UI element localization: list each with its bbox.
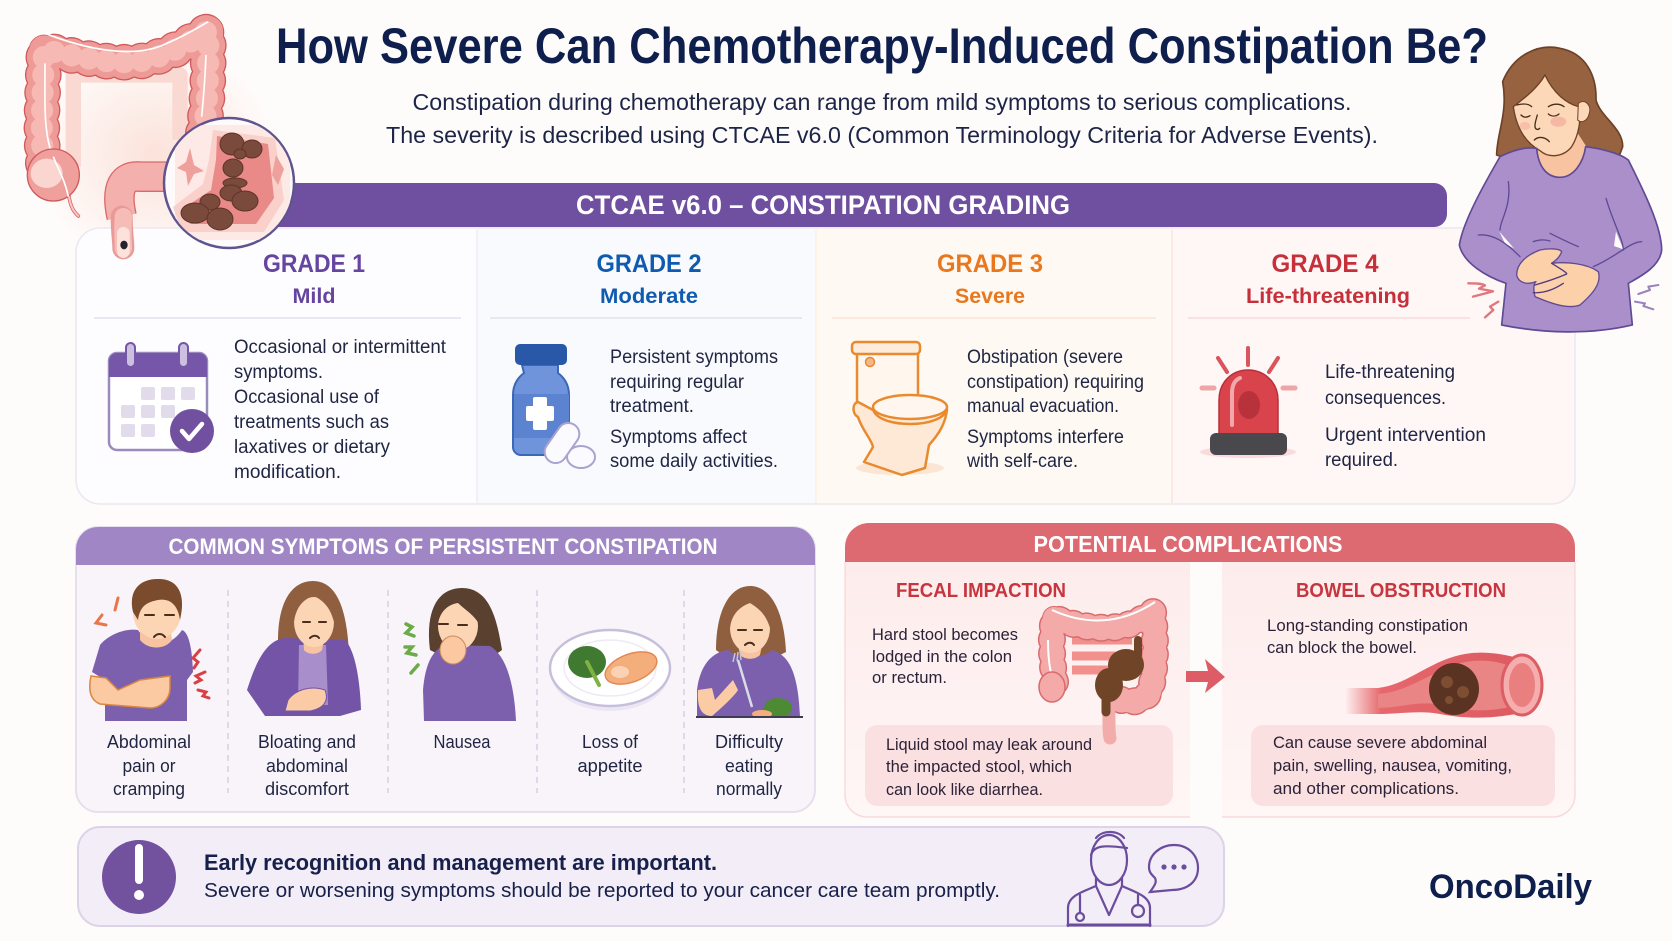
grade 3: Severe [955, 285, 1025, 308]
callout text: Severe or worsening symptoms should be reported to your cancer care team promptly. [204, 879, 1000, 902]
symptom: difficulty eating: Difficulty [715, 732, 783, 752]
symptom: loss of appetite [550, 630, 670, 776]
symptom: loss of appetite: Loss of [582, 732, 639, 752]
grade 4 [1200, 250, 1486, 471]
subtitle [386, 89, 1378, 148]
panel: potential complications [845, 523, 1575, 817]
grade 3 description: with self-care. [966, 451, 1078, 472]
symptom: bloating: abdominal [266, 756, 348, 776]
callout: early recognition [78, 827, 1224, 926]
logo: OncoDaily: OncoDaily [1429, 868, 1592, 906]
grade 1 description: modification. [234, 462, 341, 483]
grade 2 description: treatment. [610, 396, 694, 417]
icon: red siren [1200, 348, 1296, 458]
subtitle: The severity is described using CTCAE v6.0 (Common Terminology Criteria for Adverse Events). [386, 122, 1378, 148]
symptom: abdominal pain: cramping [113, 779, 185, 799]
heading banner: CTCAE v6.0 constipation grading [262, 183, 1447, 227]
complication: fecal impaction: FECAL IMPACTION [896, 580, 1066, 602]
icon: toilet [852, 342, 947, 475]
symptom: abdominal pain [90, 579, 209, 799]
icon: exclamation [102, 840, 176, 914]
leak note box: the impacted stool, which [886, 757, 1072, 776]
symptoms heading: COMMON SYMPTOMS OF PERSISTENT CONSTIPATION [168, 534, 718, 559]
complication: fecal impaction: lodged in the colon [872, 647, 1012, 666]
grade 1 description [234, 337, 447, 483]
grade 1 description: Occasional use of [234, 387, 380, 408]
complication: fecal impaction: or rectum. [872, 668, 947, 687]
icon: calendar [109, 343, 214, 453]
symptom: loss of appetite: appetite [578, 756, 642, 776]
complication: bowel obstruction: Long-standing constipation [1267, 616, 1468, 635]
illustration: magnified impacted stool [164, 118, 294, 248]
icon: colon with impacted stool [1039, 602, 1155, 738]
symptom: difficulty eating: normally [716, 779, 782, 799]
callout text [204, 850, 1000, 902]
grade 2: Moderate [600, 285, 698, 308]
grade 3 [852, 250, 1144, 475]
grade 2: GRADE 2 [596, 250, 702, 278]
grade 3 description: Obstipation (severe [967, 347, 1123, 368]
consequences note box [1251, 725, 1555, 806]
grade 3: GRADE 3 [937, 250, 1043, 278]
complication: fecal impaction [865, 580, 1173, 806]
grade 3 description: manual evacuation. [967, 396, 1119, 417]
grade 4: Life-threatening [1246, 285, 1410, 308]
grade 4 description: consequences. [1325, 388, 1446, 409]
grade 4: GRADE 4 [1272, 250, 1379, 278]
illustration: woman holding abdomen [1459, 47, 1662, 332]
consequences note box: and other complications. [1273, 779, 1459, 798]
grade 1 [109, 250, 447, 483]
symptom: bloating [247, 581, 361, 799]
symptom: nausea: Nausea [434, 732, 491, 752]
grade 3 description: Symptoms interfere [967, 427, 1124, 448]
grade 1 description: laxatives or dietary [234, 437, 390, 458]
grade 2 [513, 250, 778, 472]
grade 1 description: Occasional or intermittent [234, 337, 447, 358]
consequences note box: Can cause severe abdominal [1273, 733, 1487, 752]
symptom: abdominal pain: pain or [122, 756, 176, 776]
title: How Severe Can Chemotherapy-Induced Constipation Be? [276, 18, 1488, 74]
leak note box [865, 725, 1173, 806]
arrow [1186, 659, 1225, 693]
symptom: nausea [405, 588, 516, 752]
consequences note box: pain, swelling, nausea, vomiting, [1273, 756, 1512, 775]
symptom: bloating: discomfort [265, 779, 349, 799]
icon: medicine bottle [513, 344, 595, 468]
symptom: difficulty eating: eating [725, 756, 773, 776]
complication: bowel obstruction: can block the bowel. [1267, 638, 1417, 657]
grade 1 description: symptoms. [234, 362, 323, 383]
symptom: bloating: Bloating and [258, 732, 356, 752]
illustration: large intestine [27, 22, 208, 252]
symptom: abdominal pain: Abdominal [107, 732, 191, 752]
grade 2 description: requiring regular [610, 372, 745, 393]
callout text: Early recognition and management are important. [204, 850, 717, 875]
symptom: difficulty eating [696, 586, 803, 799]
leak note box: can look like diarrhea. [886, 780, 1043, 799]
grade 2 description: Symptoms affect [610, 427, 748, 448]
grade 1 description: treatments such as [234, 412, 389, 433]
icon: speech bubble [1149, 845, 1198, 892]
grade 4 description: Life-threatening [1325, 362, 1455, 383]
grade 3 description [966, 347, 1144, 472]
grade 4 description [1325, 362, 1486, 471]
panel: CTCAE grading [76, 228, 1575, 504]
grade 3 description: constipation) requiring [967, 372, 1144, 393]
grade 2 description: Persistent symptoms [610, 347, 778, 368]
grade 1: GRADE 1 [263, 250, 365, 278]
icon: blocked bowel [1345, 653, 1542, 718]
heading banner: CTCAE v6.0 constipation grading: CTCAE v6.0 – CONSTIPATION GRADING [576, 190, 1070, 220]
complications heading: POTENTIAL COMPLICATIONS [1034, 531, 1342, 557]
leak note box: Liquid stool may leak around [886, 735, 1092, 754]
grade 4 description: Urgent intervention [1325, 425, 1486, 446]
grade 2 description: some daily activities. [610, 451, 778, 472]
panel: common symptoms [76, 527, 815, 812]
complication: bowel obstruction [1251, 580, 1555, 806]
grade 4 description: required. [1325, 450, 1398, 471]
subtitle: Constipation during chemotherapy can range from mild symptoms to serious complications. [412, 89, 1352, 115]
grade 2 description [610, 347, 778, 472]
icon: doctor [1068, 832, 1150, 926]
grade 1: Mild [292, 285, 336, 308]
complication: fecal impaction: Hard stool becomes [872, 625, 1018, 644]
complication: bowel obstruction: BOWEL OBSTRUCTION [1296, 580, 1506, 602]
